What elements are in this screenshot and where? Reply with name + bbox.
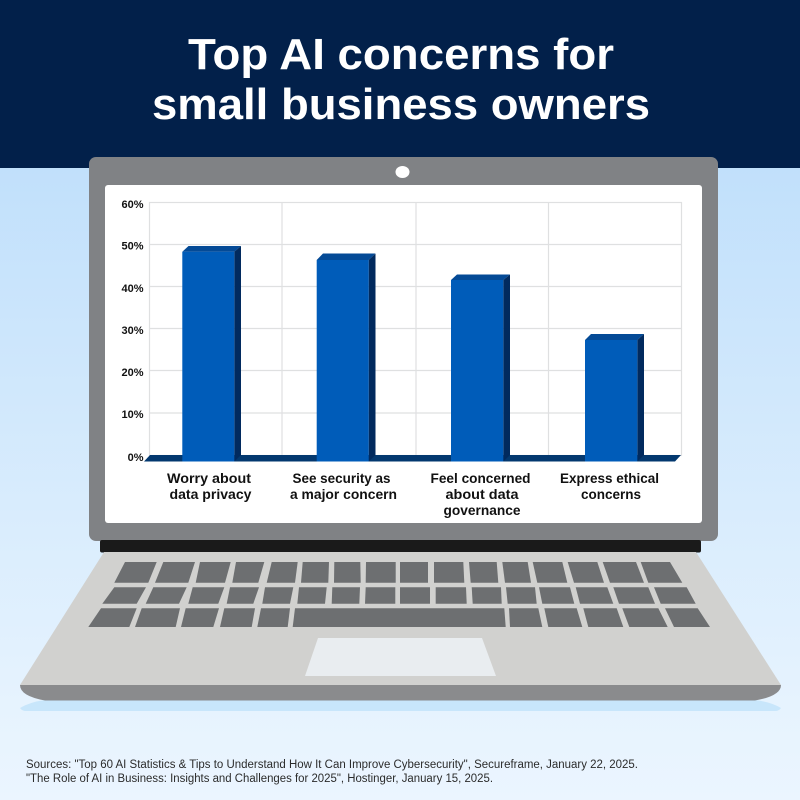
background — [0, 168, 800, 800]
category labels: data privacy — [170, 486, 252, 502]
laptop front edge — [20, 685, 781, 700]
camera — [396, 166, 410, 178]
hinge — [100, 540, 701, 552]
y axis labels: 50% — [121, 240, 144, 252]
category labels — [167, 470, 659, 518]
chart grid — [149, 202, 682, 456]
chart floor — [144, 455, 681, 462]
title: small business owners — [152, 80, 650, 129]
keyboard — [88, 562, 710, 627]
category labels: Express ethical — [560, 470, 659, 486]
y axis labels: 40% — [121, 283, 144, 295]
trackpad — [305, 638, 496, 676]
category labels: governance — [444, 502, 521, 518]
bar chart — [121, 199, 682, 518]
bar: worry about data privacy — [182, 246, 241, 462]
category labels: a major concern — [290, 486, 397, 502]
sources: "The Role of AI in Business: Insights and Challenges for 2025", Hostinger, January 15, 2025. — [26, 773, 493, 785]
y axis labels: 20% — [121, 367, 144, 379]
title — [152, 30, 650, 129]
screen — [105, 185, 702, 523]
laptop shadow — [20, 700, 781, 711]
bar: express ethical concerns — [585, 334, 644, 462]
title: Top AI concerns for — [188, 30, 614, 79]
category labels: See security as — [292, 470, 391, 486]
sources: Sources: "Top 60 AI Statistics & Tips to Understand How It Can Improve Cybersecurity", Secureframe, January 22, 2025. — [26, 759, 638, 771]
laptop — [20, 157, 781, 711]
sources — [26, 759, 638, 785]
laptop lid — [89, 157, 718, 541]
category labels: about data — [446, 486, 519, 502]
y axis labels: 60% — [121, 199, 144, 211]
category labels: Feel concerned — [430, 470, 530, 486]
y axis labels — [121, 199, 144, 464]
y axis labels: 30% — [121, 325, 144, 337]
laptop base — [20, 552, 781, 685]
bar: see security as a major concern — [317, 254, 376, 462]
y axis labels: 10% — [121, 409, 144, 421]
header band — [0, 0, 800, 168]
y axis labels: 0% — [128, 452, 144, 464]
category labels: concerns — [581, 486, 641, 502]
category labels: Worry about — [167, 470, 251, 486]
bar: feel concerned about data governance — [451, 274, 510, 462]
